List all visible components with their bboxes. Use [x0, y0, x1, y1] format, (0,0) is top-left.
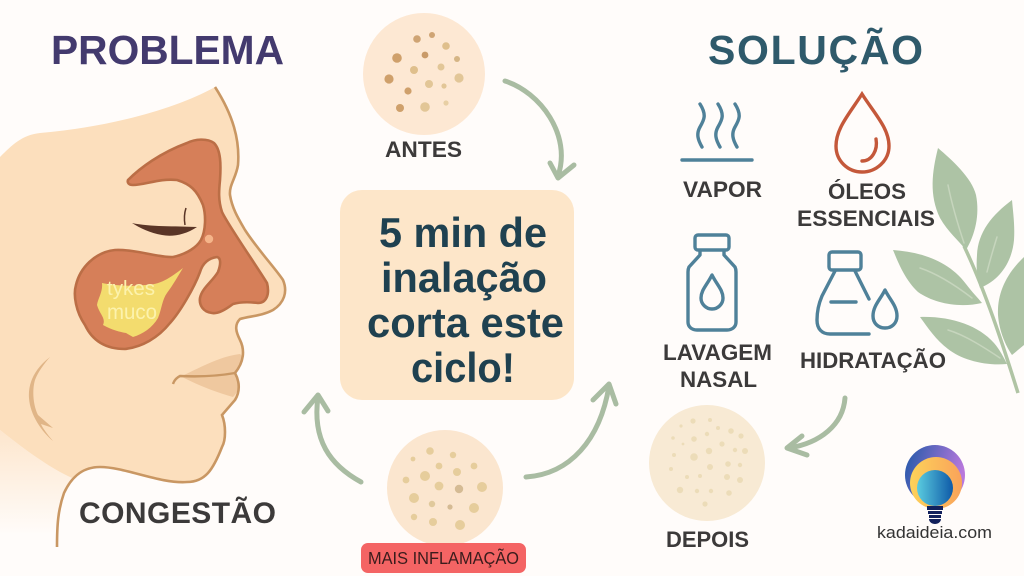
sinus cavities	[75, 140, 268, 349]
title: solução: SOLUÇÃO	[708, 27, 923, 73]
nasal bump	[205, 235, 213, 243]
mouth line	[173, 373, 235, 384]
neck fade	[0, 430, 72, 550]
circle: mais inflamação	[387, 430, 503, 546]
icon: essential oil drop	[836, 94, 889, 172]
badge: mais inflamação: MAIS INFLAMAÇÃO	[368, 547, 519, 568]
upper lip	[182, 354, 243, 376]
arrow: inflamação to congestão	[304, 395, 361, 482]
mucus label: muco	[107, 301, 157, 324]
ear	[29, 357, 53, 441]
label: óleos essenciais: ESSENCIAIS	[797, 206, 935, 231]
arrow: antes to panel	[505, 81, 574, 178]
panel: central message	[340, 190, 574, 400]
arrow: solução to depois	[787, 398, 845, 455]
label: hidratação: HIDRATAÇÃO	[800, 348, 946, 373]
panel: central message: 5 min de	[379, 209, 547, 256]
mucus	[97, 268, 183, 337]
leaf veins	[920, 185, 1000, 358]
panel: central message: ciclo!	[411, 344, 515, 391]
panel: central message: corta este	[367, 299, 564, 346]
circle: depois	[649, 405, 765, 521]
icon: hydration bottle	[817, 252, 897, 334]
label: óleos essenciais: ÓLEOS	[828, 179, 906, 204]
label: antes: ANTES	[385, 137, 462, 162]
icon: leaves	[893, 148, 1024, 393]
label: óleos essenciais	[797, 179, 935, 231]
illustration: face profile with sinuses	[0, 87, 285, 550]
lower lip	[182, 373, 239, 397]
face skin	[0, 87, 285, 482]
face outline	[57, 87, 285, 547]
label: depois: DEPOIS	[666, 527, 749, 552]
label: congestão: CONGESTÃO	[79, 496, 276, 530]
title: problema: PROBLEMA	[51, 27, 284, 73]
mucus label: tykes	[107, 278, 155, 300]
label: lavagem nasal	[663, 340, 772, 392]
panel: central message: inalação	[381, 254, 547, 301]
arrow: inflamação to panel	[526, 384, 616, 477]
label: vapor: VAPOR	[683, 177, 762, 202]
logo text: kadaideia.com	[877, 523, 992, 542]
mucus label	[107, 278, 157, 324]
logo: light bulb	[905, 445, 965, 524]
icon: vapor	[682, 104, 752, 160]
circle: antes	[363, 13, 485, 135]
label: lavagem nasal: LAVAGEM	[663, 340, 772, 365]
closed eye	[132, 208, 197, 236]
badge: mais inflamação	[361, 543, 526, 573]
label: lavagem nasal: NASAL	[680, 367, 757, 392]
icon: nasal wash bottle	[688, 235, 736, 330]
